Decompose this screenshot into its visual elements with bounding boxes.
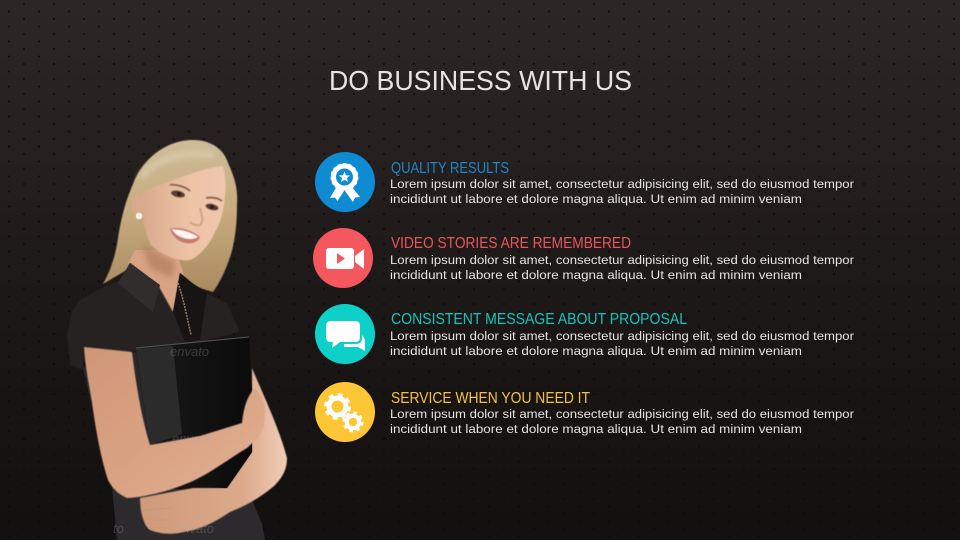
watermarks: envato xyxy=(175,521,214,536)
eye right xyxy=(205,203,219,211)
text block: incididunt ut labore et dolore magna aliqua. Ut enim ad minim veniam xyxy=(390,422,802,436)
watermarks: envato xyxy=(172,431,211,446)
back arm xyxy=(140,368,287,534)
text block: incididunt ut labore et dolore magna aliqua. Ut enim ad minim veniam xyxy=(390,344,802,358)
heading: SERVICE WHEN YOU NEED IT xyxy=(391,390,590,407)
watermarks: envato xyxy=(170,344,209,359)
shirt xyxy=(67,263,240,370)
fingers xyxy=(143,508,172,528)
placket xyxy=(173,273,207,342)
neck shadow xyxy=(142,245,175,278)
text block xyxy=(390,329,854,358)
text block: Lorem ipsum dolor sit amet, consectetur adipisicing elit, sed do eiusmod tempor xyxy=(390,253,854,267)
icon: gears xyxy=(315,382,375,442)
folder spine xyxy=(136,346,182,445)
text block: Lorem ipsum dolor sit amet, consectetur adipisicing elit, sed do eiusmod tempor xyxy=(390,407,854,421)
title: DO BUSINESS WITH US xyxy=(329,65,632,96)
earring xyxy=(136,213,142,219)
torso lower xyxy=(112,486,265,540)
face xyxy=(142,166,226,260)
mouth xyxy=(170,228,200,243)
watermarks: to xyxy=(113,521,124,536)
icon: award ribbon xyxy=(315,152,375,212)
item 2: video stories xyxy=(313,228,854,288)
item 1: quality results xyxy=(315,152,854,212)
icon: video camera xyxy=(313,228,373,288)
text block xyxy=(390,407,854,436)
necklace xyxy=(178,283,191,335)
text block xyxy=(390,253,854,282)
icon: speech bubbles xyxy=(315,304,375,364)
text block: Lorem ipsum dolor sit amet, consectetur adipisicing elit, sed do eiusmod tempor xyxy=(390,177,854,191)
neck xyxy=(128,250,190,330)
item 3: consistent message xyxy=(315,304,854,364)
ear xyxy=(132,194,144,216)
folder top edge xyxy=(136,337,249,348)
eye left xyxy=(170,189,186,199)
front arm xyxy=(84,347,265,498)
collar xyxy=(118,263,160,312)
hair highlights xyxy=(140,154,215,178)
hair xyxy=(103,140,237,292)
watermarks xyxy=(113,344,214,536)
text block: incididunt ut labore et dolore magna aliqua. Ut enim ad minim veniam xyxy=(390,268,802,282)
photo: businesswoman holding a folder xyxy=(67,140,287,540)
nose xyxy=(190,208,202,225)
folder xyxy=(136,337,252,488)
heading: CONSISTENT MESSAGE ABOUT PROPOSAL xyxy=(391,311,687,328)
body behind arm xyxy=(83,352,150,482)
eyebrows xyxy=(170,185,222,201)
text block: Lorem ipsum dolor sit amet, consectetur adipisicing elit, sed do eiusmod tempor xyxy=(390,329,854,343)
text block: incididunt ut labore et dolore magna aliqua. Ut enim ad minim veniam xyxy=(390,192,802,206)
text block xyxy=(390,177,854,206)
heading: QUALITY RESULTS xyxy=(391,160,509,177)
item 4: service xyxy=(315,382,854,442)
heading: VIDEO STORIES ARE REMEMBERED xyxy=(391,235,631,252)
